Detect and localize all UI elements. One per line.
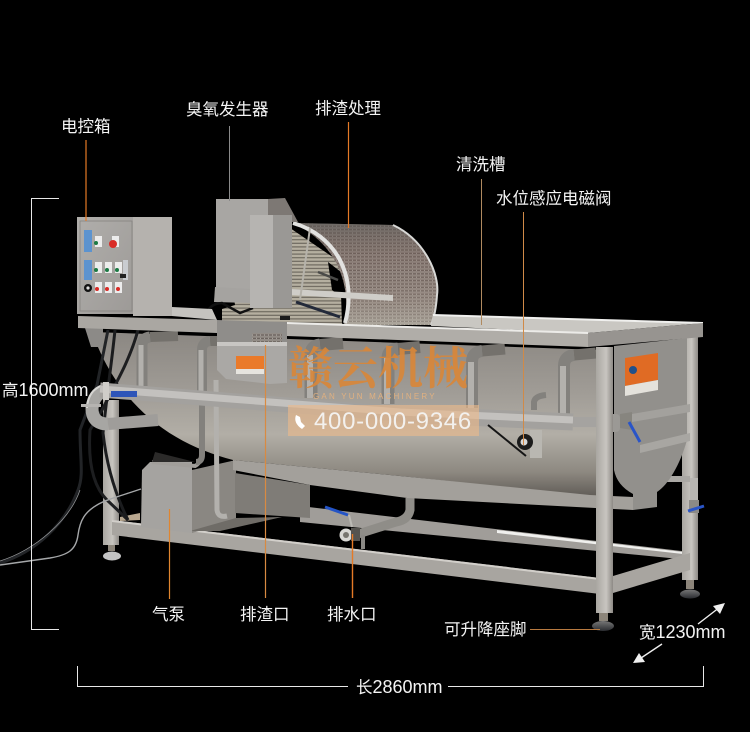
callout: 电控箱: 电控箱 [61,117,110,136]
callout: 排渣处理 [315,99,381,228]
callout: 臭氧发生器 [186,100,269,201]
trough right end plate [614,338,687,510]
dimension: height 1600mm [2,198,89,630]
drain pipe and valve [325,498,410,549]
air pump box [141,440,310,533]
solenoid valve [488,425,542,458]
callout: 气泵: 气泵 [152,605,185,624]
ozone generator back panel [216,198,298,290]
main water pipe [81,382,690,453]
back frame and rear legs [300,335,700,598]
arrow: up right [698,603,725,624]
control panel switches [84,230,128,293]
dimension: length 2860mm: 长2860mm [356,677,443,697]
callout: 气泵 [152,509,185,624]
machine photo [0,198,704,631]
icon: phone [295,415,305,429]
right drain tap [688,478,704,513]
ozone generator front box [250,215,292,320]
left end flange [85,328,103,347]
watermark logo: 赣云机械 [288,344,468,394]
callout: 清洗槽: 清洗槽 [456,155,506,174]
orange plate sticker [625,353,658,396]
gap in drum [328,262,345,300]
callout: 排水口 [327,534,376,624]
watermark logo: GAN YUN MACHINERY [313,392,437,401]
dimension: length 2860mm [78,666,704,697]
far rim surface [172,307,217,320]
inner back of drum [222,228,342,325]
callout: 排渣口: 排渣口 [240,605,290,624]
callout: 电控箱 [61,117,110,221]
overflow pipes [141,336,596,516]
arm bracket [207,287,253,317]
callout: 臭氧发生器: 臭氧发生器 [186,100,269,119]
dimension: width 1230mm [633,603,726,663]
callout: 排渣处理: 排渣处理 [315,99,381,118]
left leg and lower frame [103,400,600,594]
callout: 水位感应电磁阀: 水位感应电磁阀 [496,189,612,208]
callout: 排水口: 排水口 [327,605,376,624]
electric control box [77,217,172,316]
dimension: width 1230mm: 宽1230mm [639,622,726,642]
trough body [92,332,600,497]
callout: 可升降座脚: 可升降座脚 [444,620,526,639]
phone number strip: 400-000-9346 [314,408,472,435]
trough rim front [78,316,703,347]
hoses [0,330,141,565]
dimension: height 1600mm: 高1600mm [2,380,89,400]
arrow: down left [633,644,662,663]
drum mesh [232,223,437,325]
right front leg [592,347,614,631]
slag chute [217,320,287,384]
trough bottom flange [233,460,633,510]
